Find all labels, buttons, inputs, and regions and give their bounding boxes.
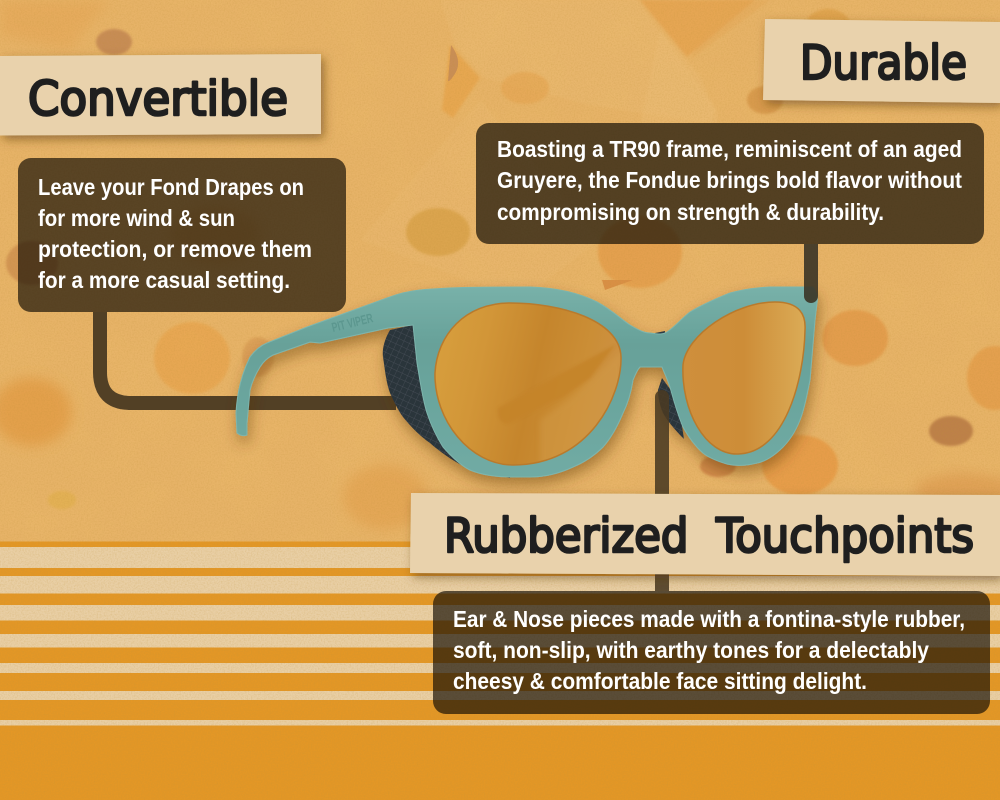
left lens rim xyxy=(435,303,621,465)
connector: convertible xyxy=(100,312,396,403)
heading: Convertible xyxy=(0,54,321,136)
left lens xyxy=(435,303,622,465)
panel: durable description: Boasting a TR90 frame, reminiscent of an aged xyxy=(497,136,962,162)
heading: Durable xyxy=(763,19,1000,103)
panel: convertible description: protection, or remove them xyxy=(38,236,312,262)
left side shield xyxy=(383,325,510,478)
connector: durable xyxy=(804,244,818,303)
left lens pale reflection xyxy=(542,397,580,460)
sunglasses xyxy=(236,287,817,478)
right lens xyxy=(683,302,805,454)
panel: convertible description: for more wind & sun xyxy=(38,205,235,231)
right side shield xyxy=(658,378,684,439)
panel: convertible description: Leave your Fond Drapes on xyxy=(38,174,304,200)
bridge shadow piece xyxy=(655,331,665,337)
panel: convertible description: for a more casual setting. xyxy=(38,267,290,293)
temple logo: PIT VIPER xyxy=(330,310,375,335)
panel: durable description xyxy=(476,123,984,244)
panel: rubberized touchpoints description: soft, non-slip, with earthy tones for a delectably xyxy=(453,637,929,663)
panel: durable description: Gruyere, the Fondue brings bold flavor without xyxy=(497,167,962,193)
left lens band reflection xyxy=(500,346,613,416)
connector: rubberized touchpoints xyxy=(655,390,669,591)
panel: durable description: compromising on strength & durability. xyxy=(497,199,884,225)
panel: rubberized touchpoints description: cheesy & comfortable face sitting delight. xyxy=(453,668,867,694)
panel: rubberized touchpoints description xyxy=(433,591,990,714)
panel: convertible description xyxy=(18,158,346,312)
frame xyxy=(236,287,817,477)
heading: Convertible: Convertible xyxy=(28,72,288,127)
background: retro stripes xyxy=(0,542,1000,800)
heading: Rubberized Touchpoints xyxy=(410,493,1000,576)
heading: Durable: Durable xyxy=(800,36,967,91)
